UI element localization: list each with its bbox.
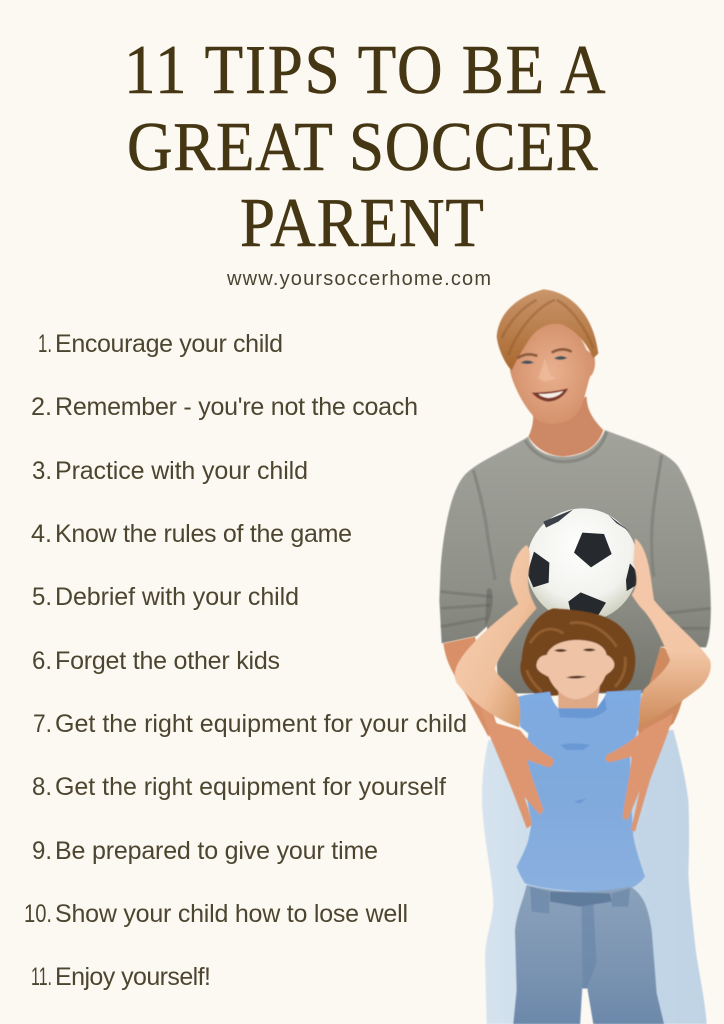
man's head <box>497 289 598 424</box>
boy's hair <box>520 608 635 697</box>
boy's face <box>536 640 614 699</box>
title: GREAT SOCCER <box>127 109 598 186</box>
tip 1: Encourage your child <box>55 330 283 358</box>
hair strands <box>502 300 593 355</box>
website url: www.yoursoccerhome.com <box>226 268 491 290</box>
tip 2: 2. <box>31 393 52 421</box>
boy's neck <box>558 685 600 711</box>
tip 10: Show your child how to lose well <box>55 900 408 928</box>
boy's eyes and mouth <box>554 648 596 679</box>
boy's left arm and hand <box>455 545 537 727</box>
tip 6: Forget the other kids <box>55 647 280 675</box>
soccer ball <box>526 508 638 622</box>
tip 3: Practice with your child <box>55 457 308 485</box>
smile <box>532 388 568 402</box>
tip 9: 9. <box>32 837 52 865</box>
man's jeans <box>482 730 707 1024</box>
tip 6: 6. <box>32 647 52 675</box>
t-shirt collar and folds <box>558 697 607 803</box>
man's forearms <box>443 637 684 747</box>
tip 8: 8. <box>32 773 52 801</box>
man's shirt <box>439 430 711 693</box>
tip 7: Get the right equipment for your child <box>55 710 467 738</box>
boy's shorts <box>513 885 664 1024</box>
tip 3: 3. <box>32 457 52 485</box>
tip 1: 1. <box>38 330 52 358</box>
shirt seams and collar <box>473 432 662 580</box>
boy's right arm and hand <box>632 538 711 727</box>
title <box>124 32 606 262</box>
tip 11: 11. <box>31 963 52 991</box>
title: 11 TIPS TO BE A <box>124 32 606 109</box>
tip 5: 5. <box>32 583 52 611</box>
face <box>510 320 595 424</box>
man's right hand <box>605 713 673 832</box>
pentagons <box>527 509 638 616</box>
tip 5: Debrief with your child <box>55 583 299 611</box>
tip 2: Remember - you're not the coach <box>55 393 418 421</box>
title: PARENT <box>240 185 484 262</box>
man's left hand <box>475 690 553 828</box>
man's neck <box>528 397 603 457</box>
photo: father and son with soccer ball <box>439 289 711 1024</box>
shorts waistband <box>550 892 612 907</box>
nose highlight <box>538 358 557 382</box>
tip 8: Get the right equipment for yourself <box>55 773 446 801</box>
boy's t-shirt <box>517 690 645 892</box>
tips list <box>24 330 467 991</box>
tip 10: 10. <box>24 900 52 928</box>
eyebrows <box>517 349 572 358</box>
tip 11: Enjoy yourself! <box>55 963 211 991</box>
tip 9: Be prepared to give your time <box>55 837 378 865</box>
tip 4: Know the rules of the game <box>55 520 352 548</box>
sleeve folds <box>441 592 711 628</box>
boy <box>455 538 711 1024</box>
hair curls <box>527 623 625 692</box>
eyes <box>521 356 567 364</box>
tip 4: 4. <box>31 520 52 548</box>
shorts details <box>530 887 630 988</box>
hair <box>497 289 598 371</box>
tip 7: 7. <box>33 710 52 738</box>
